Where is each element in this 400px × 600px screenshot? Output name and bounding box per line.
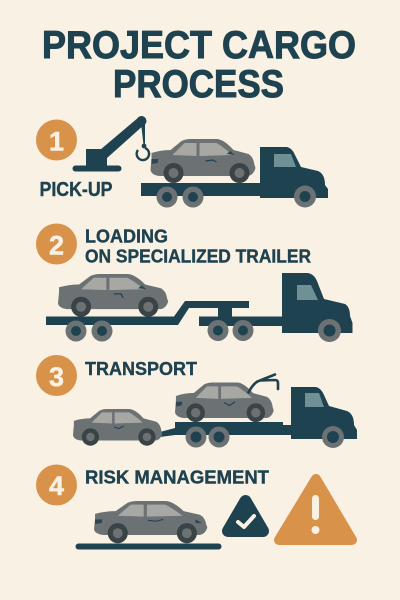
badge: number 2 [36,224,77,264]
heading: transport: TRANSPORT [85,358,198,379]
car on ground [94,501,207,543]
badge: number 3 [36,355,77,396]
heading: loading on specialized trailer: LOADING [85,226,168,246]
car being towed [73,409,162,446]
badge: number 4: 4 [49,471,64,501]
badge: number 1: 1 [49,126,64,156]
panel: step 3 transport [36,355,357,448]
icon: crane [72,116,149,172]
title: PROCESS [113,63,284,106]
panel: step 2 loading [36,224,352,342]
icon: check triangle [228,501,263,531]
badge: number 3: 3 [49,362,64,392]
panel: step 1 pick-up [36,116,328,208]
car on flatbed [150,139,256,183]
car on tow truck with open hood [175,374,278,422]
panel: step 4 risk management [36,464,352,550]
heading: risk management: RISK MANAGEMENT [85,466,270,488]
road line [76,544,222,550]
icon: warning triangle [279,479,352,540]
truck: lowboy trailer [46,273,352,342]
title [42,24,356,106]
truck: flatbed [141,147,328,208]
heading: loading on specialized trailer: ON SPECIALIZED TRAILER [85,246,311,266]
car on trailer [58,274,168,317]
title: PROJECT CARGO [42,24,356,67]
heading: pick-up: PICK-UP [40,179,112,201]
badge: number 4 [36,464,77,506]
badge: number 2: 2 [49,230,64,260]
truck: tow truck [160,387,357,448]
heading: loading on specialized trailer [85,226,311,266]
badge: number 1 [36,120,77,160]
